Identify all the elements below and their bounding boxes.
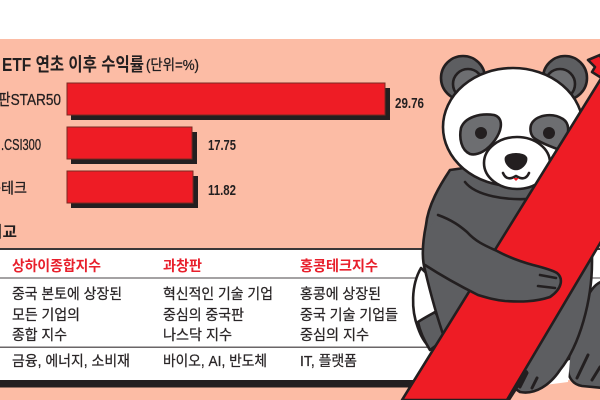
panda right leg — [568, 281, 600, 388]
bar: CSI300: .CSI300 — [1, 137, 41, 154]
column: 홍콩테크지수: 중심의 지수 — [300, 327, 369, 344]
panda ears — [441, 56, 587, 100]
panda left leg — [413, 268, 455, 350]
column: 과창판 — [163, 258, 273, 370]
red rising arrow ribbon — [402, 55, 600, 400]
panda white belly gap — [545, 360, 570, 385]
panda head — [443, 68, 583, 189]
column: 홍콩테크지수 — [300, 258, 398, 370]
column: 홍콩테크지수: 홍콩에 상장된 — [300, 286, 381, 303]
column: 과창판: 혁신적인 기술 기업 — [163, 286, 273, 303]
column: 상하이종합지수: 종합 지수 — [12, 327, 67, 344]
bar: CSI300: 17.75 — [208, 138, 236, 154]
panda neck band — [465, 182, 540, 199]
panda body — [423, 150, 592, 393]
eye patches — [460, 115, 501, 154]
panda foot toes — [520, 355, 600, 388]
column: 상하이종합지수: 상하이종합지수 — [12, 258, 101, 275]
panda hugging arm — [425, 215, 561, 302]
column: 홍콩테크지수: 홍콩테크지수 — [300, 258, 378, 275]
column: 과창판: 바이오, AI, 반도체 — [163, 353, 267, 370]
title: (단위=%) — [146, 57, 199, 74]
muzzle — [484, 137, 550, 189]
comparison table — [0, 248, 600, 388]
bar: CSI300 — [1, 127, 236, 164]
column: 상하이종합지수: 금융, 에너지, 소비재 — [12, 353, 130, 370]
column: 홍콩테크지수: IT, 플랫폼 — [300, 353, 357, 370]
bar chart: ETF returns — [0, 83, 424, 208]
bar: tech — [0, 171, 236, 208]
nose — [506, 154, 526, 169]
icon: panda hugging rising red arrow — [402, 55, 600, 400]
mouth — [503, 173, 529, 178]
title: ETF 연초 이후 수익률 — [2, 54, 144, 75]
bar: tech: 11.82 — [208, 183, 236, 199]
bar: STAR50: 29.76 — [395, 96, 424, 112]
column: 과창판: 나스닥 지수 — [163, 327, 232, 344]
column: 상하이종합지수 — [12, 258, 130, 370]
column: 상하이종합지수: 중국 본토에 상장된 — [12, 286, 122, 303]
column: 과창판: 중심의 중국판 — [163, 307, 244, 324]
column: 과창판: 과창판 — [163, 258, 202, 275]
column: 상하이종합지수: 모든 기업의 — [12, 307, 80, 324]
bar: STAR50 — [0, 83, 424, 120]
column: 홍콩테크지수: 중국 기술 기업들 — [300, 307, 398, 324]
